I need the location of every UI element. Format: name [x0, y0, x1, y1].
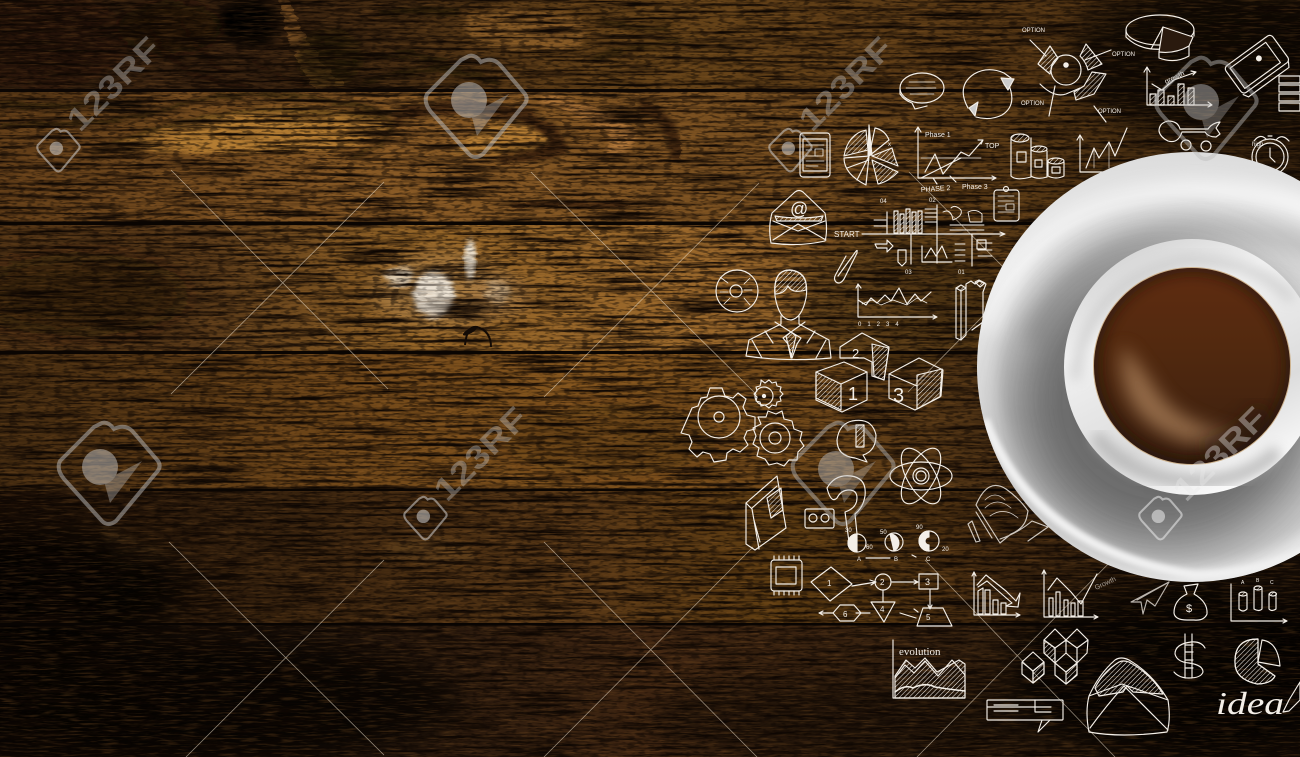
icon: alarm clock [1252, 136, 1289, 175]
icon: wave line chart [856, 284, 937, 328]
icon: percent circles: C [926, 557, 931, 563]
icon: flowchart: 1 [827, 579, 832, 588]
icon: percent circles [845, 525, 949, 563]
watermark: camera mark top centre [426, 56, 527, 157]
icon: smartphone [1224, 34, 1293, 99]
icon: phases line chart: PHASE 2 [921, 185, 951, 194]
icon: column chart: B [1256, 578, 1260, 584]
icon: growth bar chart [1042, 570, 1117, 619]
watermark: 123RF logo top left: 123RF [59, 30, 168, 138]
icon: rising bar chart [1144, 67, 1212, 107]
icon: sliced pie [1235, 639, 1280, 684]
watermark: 123RF logo top right: 123RF [791, 30, 900, 138]
watermark: 123RF logo lower centre: 123RF [426, 400, 535, 508]
icon: flowchart: 4 [880, 605, 885, 614]
icon: money bag: $ [1186, 603, 1192, 615]
icon: numbered blocks: 1 [848, 384, 858, 404]
icon: phases line chart: TOP [985, 143, 1000, 150]
icon: percent circles: A [857, 557, 861, 563]
icon: exploded pie: x [888, 142, 891, 148]
icon: evolution area chart: evolution [899, 646, 941, 658]
saucer [977, 152, 1300, 582]
icon: start flow infographic: 04 [880, 199, 887, 205]
icon: atom [890, 442, 952, 510]
icon: paperclip [834, 250, 857, 283]
icon: question bubble [837, 420, 876, 462]
icon: wrench [1159, 121, 1220, 151]
icon: businessman [746, 270, 831, 360]
icon: tablet [800, 133, 830, 177]
icon: percent circles: 30 [845, 528, 852, 534]
watermark: 123RF logo on saucer [1139, 400, 1274, 539]
icon: phases line chart: Phase 3 [962, 184, 988, 191]
icon: go tag [805, 509, 834, 528]
icon: clipboard [994, 186, 1019, 221]
icon: open notebook [968, 485, 1048, 543]
text: idea: idea [1216, 685, 1284, 721]
icon: evolution area chart [893, 640, 965, 698]
icon: microchip [771, 556, 802, 595]
watermark: camera mark lower left [59, 423, 160, 524]
icon: flowchart [811, 567, 952, 626]
watermark: 123RF logo top left [37, 30, 168, 171]
icon: book [746, 476, 786, 550]
icon: start flow infographic: 01 [958, 270, 965, 276]
icon: numbered blocks: 3 [893, 385, 904, 407]
icon: percent circles: 60 [866, 545, 873, 551]
icon: 3D columns [956, 280, 986, 340]
sketch icons around the cup [681, 15, 1300, 735]
watermark: 123RF logo on saucer: 123RF [1165, 400, 1274, 508]
icon: start flow infographic: 02 [929, 198, 936, 204]
icon: flowchart: 5 [926, 613, 931, 622]
icon: at envelope [770, 190, 826, 245]
icon: alarm clock: high [1252, 142, 1263, 148]
watermark: camera mark beside gears [793, 423, 894, 524]
icon: speech box [987, 700, 1063, 732]
icon: option wheel: OPTION [1022, 28, 1045, 34]
icon: zigzag line chart [1077, 128, 1127, 172]
icon: numbered blocks [816, 333, 943, 412]
icon: cycle arrows [963, 70, 1014, 119]
icon: percent circles: 20 [942, 547, 949, 553]
icon: isometric cubes [1022, 629, 1088, 684]
watermark: 123RF logo top right [769, 30, 900, 171]
icon: column chart [1231, 578, 1287, 623]
icon: question mark [827, 476, 865, 542]
icon: phases line chart [915, 127, 1000, 194]
icon: option wheel: OPTION [1021, 101, 1044, 107]
icon: numbered blocks: 2 [852, 346, 859, 361]
icon: flowchart: 2 [880, 578, 885, 587]
icon: dollar sign [1174, 634, 1205, 678]
icon: round badge [716, 270, 758, 312]
icon: percent circles: 50 [880, 530, 887, 536]
icon: option wheel [1021, 28, 1135, 122]
icon: large envelope [1087, 658, 1169, 735]
icon: start flow infographic [834, 198, 1005, 276]
icon: start flow infographic: START [834, 230, 860, 239]
icon: column chart: A [1241, 580, 1245, 586]
icon: percent circles: B [894, 557, 898, 563]
icon: flowchart: 6 [843, 610, 848, 619]
icon: paper plane [1131, 582, 1169, 614]
icon: percent circles: 90 [916, 525, 923, 531]
icon: stacked cans [1011, 134, 1064, 179]
icon: option wheel: OPTION [1112, 52, 1135, 58]
icon: wave line chart: 01234 [858, 322, 905, 328]
diagonal guide lines [169, 170, 1127, 757]
icon: money bag [1174, 584, 1207, 620]
icon: pie chart discs [1126, 15, 1194, 61]
text: idea [1216, 682, 1300, 721]
watermark: camera mark far top right [1156, 58, 1257, 159]
icon: start flow infographic: 03 [905, 270, 912, 276]
icon: flowchart: 3 [925, 577, 930, 587]
coffee surface [1093, 267, 1291, 465]
icon: falling bar chart [972, 572, 1020, 617]
icon: gears [681, 380, 804, 466]
coffee cup [1064, 239, 1300, 495]
icon: growth bar chart: Growth [1094, 576, 1117, 592]
icon: phases line chart: Phase 1 [925, 132, 951, 139]
icon: option wheel: OPTION [1098, 109, 1121, 115]
icon: column chart: C [1270, 580, 1274, 586]
icon: stacked lines [1279, 76, 1300, 111]
icon: rising bar chart: growth [1164, 70, 1186, 86]
icon: exploded pie [844, 125, 898, 185]
icon: at envelope: @ [790, 199, 808, 219]
watermark: 123RF logo lower centre [404, 400, 535, 539]
icon: speech bubble [900, 73, 944, 109]
